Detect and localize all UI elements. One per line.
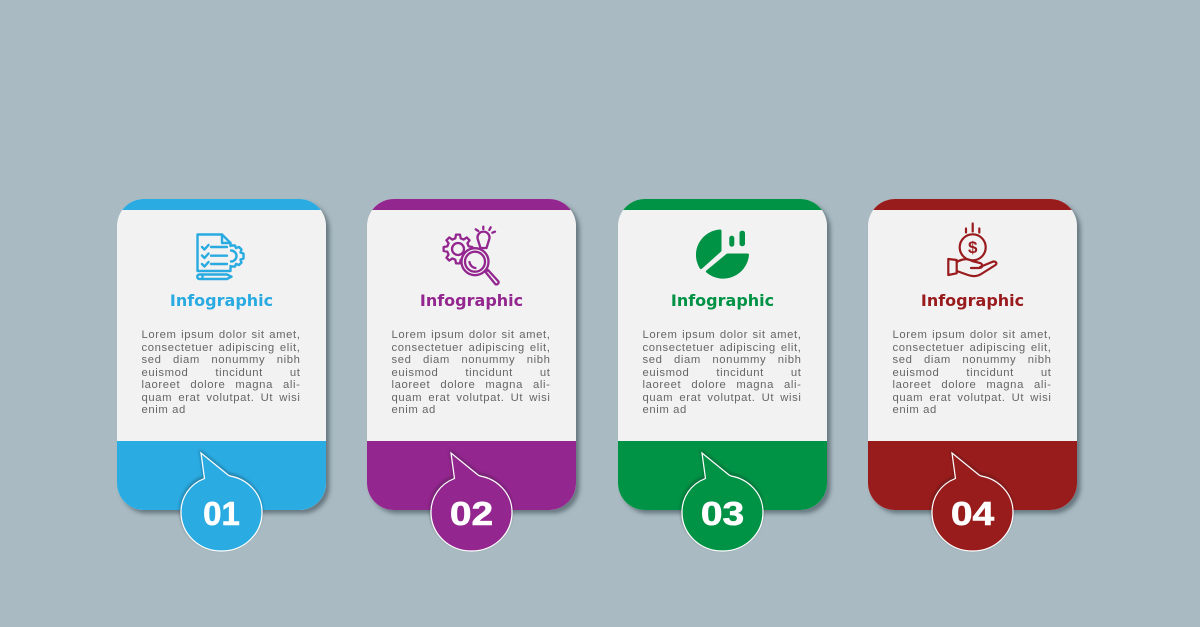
- text block: sed diam nonummy nibh: [892, 354, 1052, 366]
- text block: quam erat volutpat. Ut wisi: [142, 392, 300, 404]
- text block: quam erat volutpat. Ut wisi: [392, 392, 550, 404]
- text block: consectetuer adipiscing elit,: [642, 342, 802, 354]
- card background: [618, 199, 827, 510]
- panel: card 02: [367, 199, 582, 552]
- text block: Lorem ipsum dolor sit amet,: [642, 329, 802, 341]
- heading: Infographic: [671, 291, 774, 310]
- heading: Infographic: [170, 291, 273, 310]
- number: 02: [450, 495, 493, 532]
- number bubble: [431, 453, 512, 551]
- text block: consectetuer adipiscing elit,: [392, 342, 550, 354]
- icon: hand holding dollar coin: $: [968, 238, 978, 257]
- text block: sed diam nonummy nibh: [392, 354, 550, 366]
- text block: euismod tincidunt ut: [392, 367, 550, 379]
- text block: euismod tincidunt ut: [142, 367, 300, 379]
- text block: sed diam nonummy nibh: [142, 354, 300, 366]
- panel: card 04: [868, 199, 1083, 552]
- text block: Lorem ipsum dolor sit amet,: [142, 329, 300, 341]
- text block: [642, 329, 802, 416]
- text block: euismod tincidunt ut: [642, 367, 802, 379]
- text block: euismod tincidunt ut: [892, 367, 1052, 379]
- heading: Infographic: [420, 291, 523, 310]
- text block: [392, 329, 550, 416]
- text block: consectetuer adipiscing elit,: [142, 342, 300, 354]
- text block: enim ad: [142, 404, 186, 416]
- text block: quam erat volutpat. Ut wisi: [642, 392, 802, 404]
- number: 04: [951, 495, 994, 532]
- panel: card 01: [117, 199, 332, 552]
- heading: Infographic: [921, 291, 1024, 310]
- text block: laoreet dolore magna ali-: [142, 379, 300, 391]
- text block: [142, 329, 300, 416]
- number bubble: [181, 453, 262, 551]
- text block: Lorem ipsum dolor sit amet,: [892, 329, 1052, 341]
- icon: checklist document with gear: [197, 234, 244, 279]
- text block: quam erat volutpat. Ut wisi: [892, 392, 1052, 404]
- number bubble: [932, 453, 1013, 551]
- panel: card 03: [618, 199, 833, 552]
- card background: [367, 199, 576, 510]
- card background: [868, 199, 1077, 510]
- icon: pie chart with bars: [697, 231, 748, 277]
- text block: laoreet dolore magna ali-: [892, 379, 1052, 391]
- text block: [892, 329, 1052, 416]
- number: 03: [701, 495, 744, 532]
- icon: hand holding dollar coin: [948, 224, 996, 276]
- text block: consectetuer adipiscing elit,: [892, 342, 1052, 354]
- text block: sed diam nonummy nibh: [642, 354, 802, 366]
- card background: [117, 199, 326, 510]
- text block: laoreet dolore magna ali-: [392, 379, 550, 391]
- text block: Lorem ipsum dolor sit amet,: [392, 329, 550, 341]
- number: 01: [203, 495, 240, 532]
- text block: enim ad: [392, 404, 436, 416]
- text block: laoreet dolore magna ali-: [642, 379, 802, 391]
- icon: gear, magnifier and light bulb: [444, 227, 499, 284]
- text block: enim ad: [892, 404, 937, 416]
- number bubble: [682, 453, 763, 551]
- text block: enim ad: [642, 404, 687, 416]
